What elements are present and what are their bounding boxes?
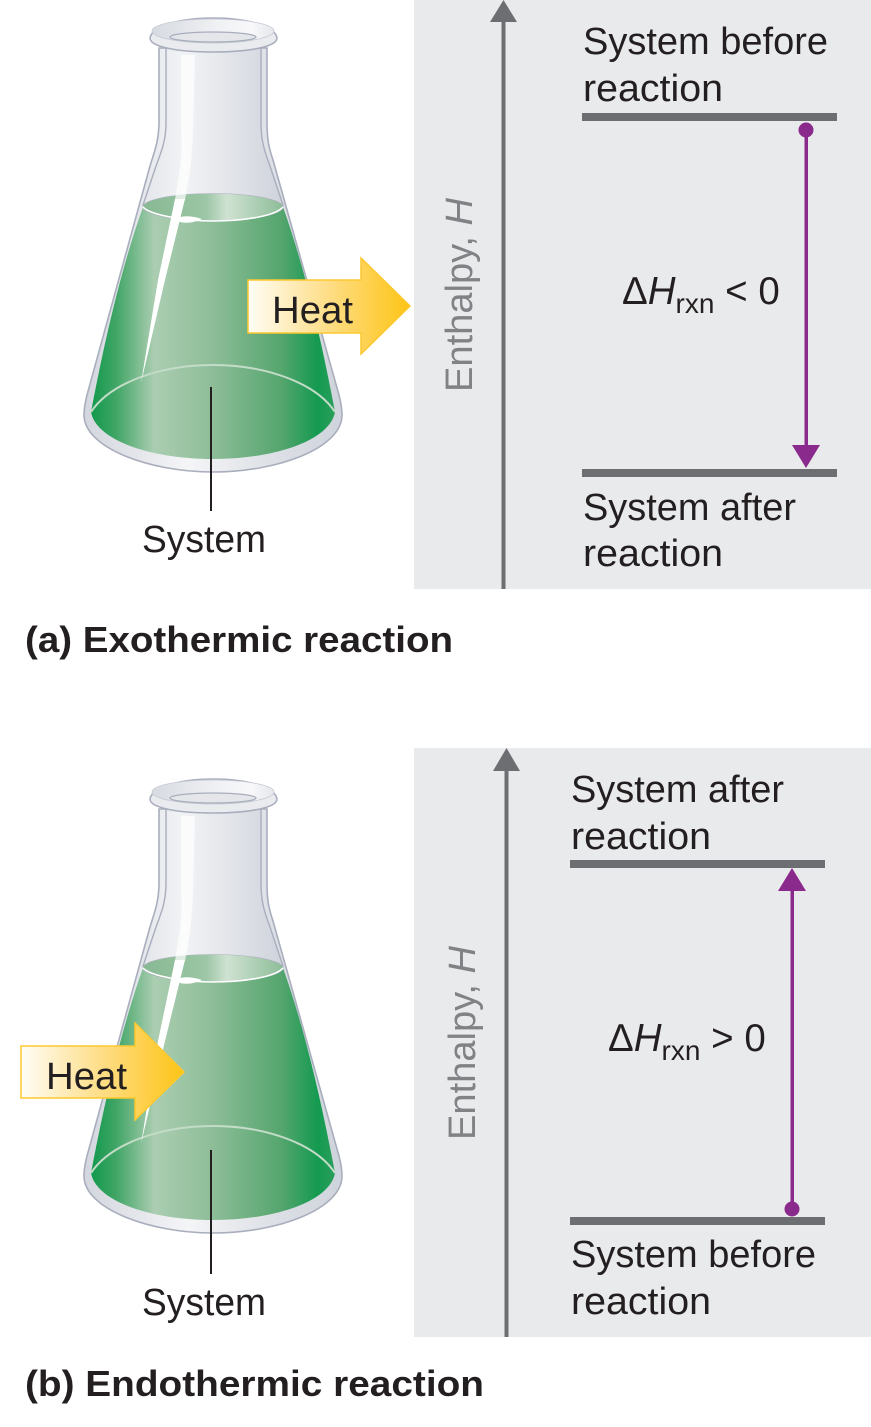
flask: exothermic system (84, 18, 342, 472)
label: delta H greater than zero: > 0 (700, 1017, 766, 1060)
axis label: Enthalpy, H (442, 945, 484, 1140)
label: delta H greater than zero: ΔH (608, 1017, 662, 1060)
axis label: Enthalpy, H (439, 197, 481, 392)
heading: exothermic reaction: (a) Exothermic reaction (25, 619, 453, 660)
label: system: System (142, 1282, 266, 1324)
label: delta H less than zero: ΔH (622, 270, 676, 313)
label: system before reaction: reaction (583, 68, 723, 110)
panel: endothermic enthalpy diagram (414, 748, 871, 1337)
label: system after reaction: System after (571, 769, 784, 811)
label: system after reaction: System after (583, 487, 796, 529)
label: system: System (142, 519, 266, 561)
label: system before reaction: reaction (571, 1281, 711, 1323)
enthalpy axis arrow (493, 748, 520, 1337)
heat arrow leaving flask (248, 258, 410, 354)
heat arrow entering flask (21, 1023, 184, 1120)
label: heat: Heat (272, 290, 353, 332)
label: system after reaction: reaction (583, 533, 723, 575)
heading: endothermic reaction: (b) Endothermic reaction (25, 1363, 484, 1404)
system leader line (210, 387, 212, 511)
panel: exothermic enthalpy diagram (414, 0, 871, 589)
label: system before reaction: System before (571, 1234, 816, 1276)
label: delta H greater than zero: rxn (662, 1035, 700, 1066)
flask: endothermic system (84, 779, 342, 1233)
label: delta H less than zero: < 0 (714, 270, 780, 313)
downward purple arrow (792, 122, 820, 468)
upward purple arrow (778, 868, 806, 1216)
enthalpy axis arrow (490, 0, 517, 589)
label: system before reaction: System before (583, 21, 828, 63)
level: system after reaction (570, 860, 825, 868)
level: system before reaction (582, 113, 837, 121)
label: heat: Heat (46, 1056, 127, 1098)
system leader line (210, 1150, 212, 1274)
label: delta H less than zero: rxn (676, 288, 714, 319)
label: system after reaction: reaction (571, 816, 711, 858)
level: system after reaction (582, 469, 837, 477)
level: system before reaction (570, 1217, 825, 1225)
